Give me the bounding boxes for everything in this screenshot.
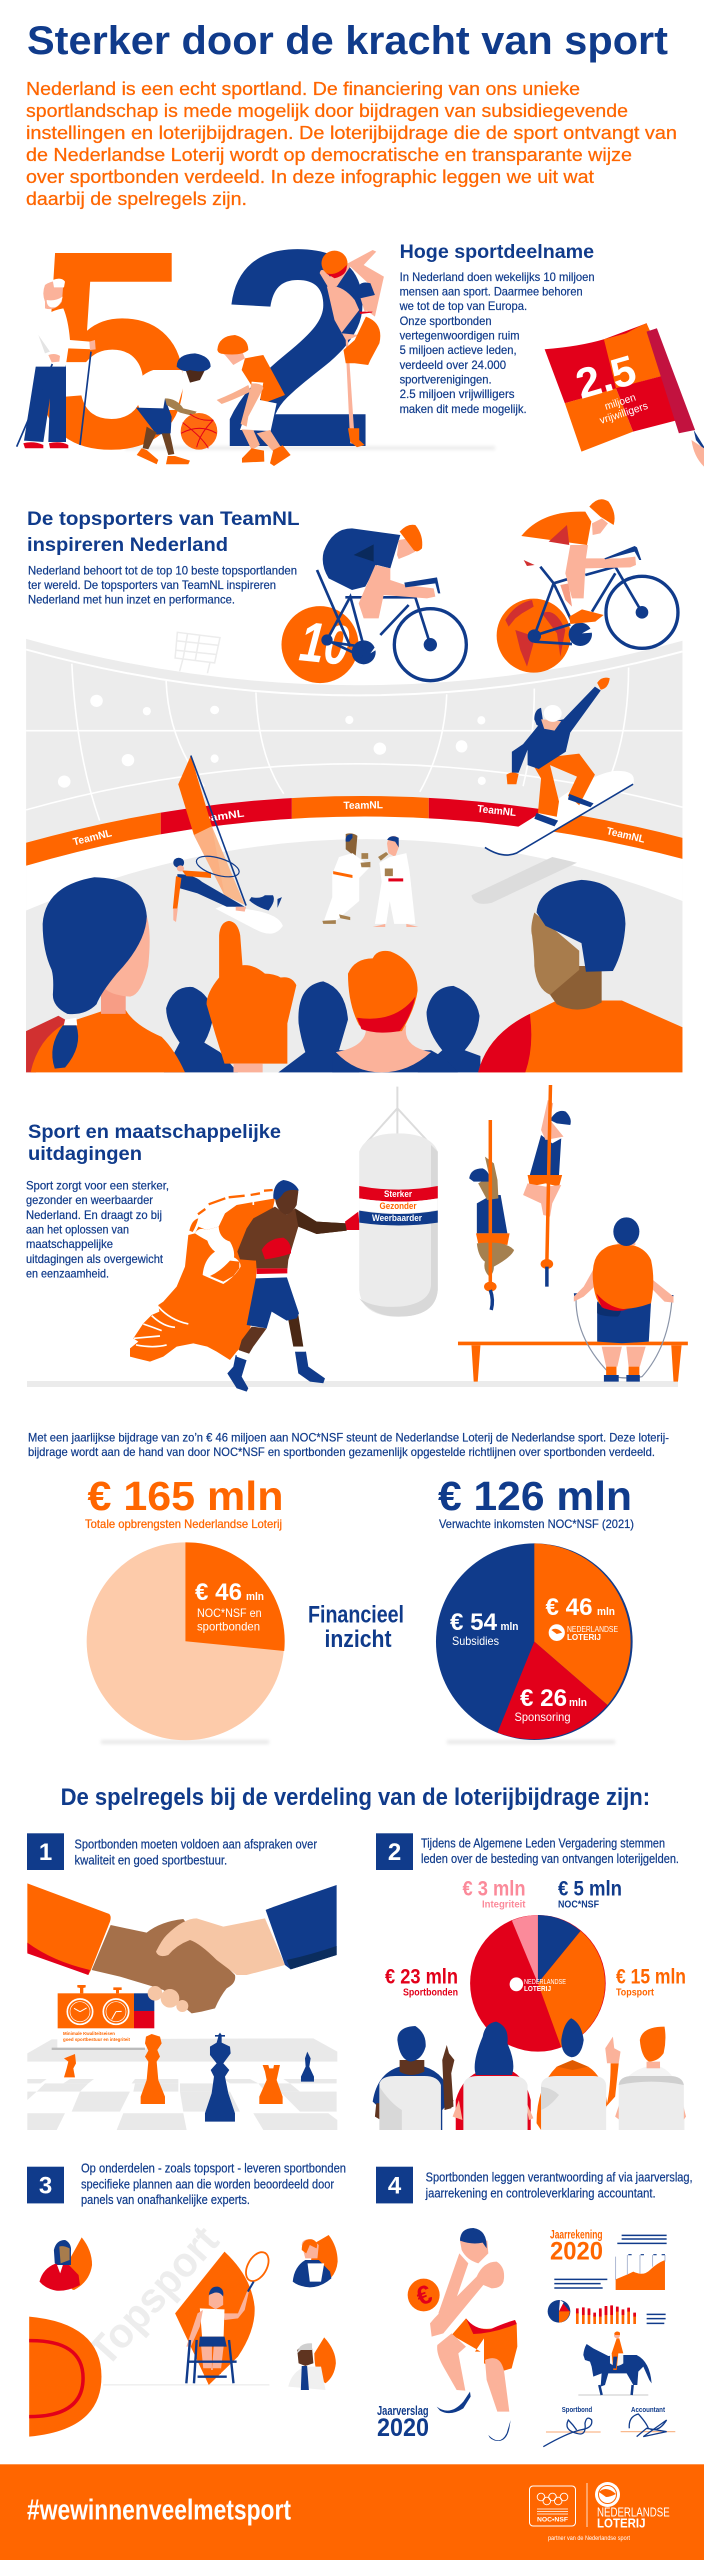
text: financial intro: Met een jaarlijkse bijdrage van zo’n € 46 miljoen aan NOC*NSF steunt de Nederlandse Loterij de Nederlandse sport. Deze loterij-: [28, 1432, 669, 1445]
signature labels: [562, 2405, 665, 2414]
panel: financieel inzicht: [28, 1432, 669, 1744]
heading: topsporters: De topsporters van TeamNL: [27, 509, 300, 530]
tagline: partner van de Nederlandse sport: [548, 2535, 630, 2542]
pie chart: NOC*NSF income: Sponsoring: [514, 1711, 570, 1724]
pie chart: loterij revenue: [87, 1542, 285, 1744]
pie chart: NOC*NSF income: € 54: [450, 1609, 498, 1636]
intro text: de Nederlandse Loterij wordt op democratische en transparante wijze: [26, 145, 632, 165]
text: rule 4: [425, 2171, 693, 2201]
audience member 4: [615, 2027, 686, 2130]
intro text: over sportbonden verdeeld. In deze infographic leggen we uit wat: [26, 167, 594, 187]
pie labels: € 15 mln: [616, 1965, 686, 1988]
text lines: [554, 2235, 667, 2323]
heading: uitdagingen: uitdagingen: [28, 1144, 142, 1165]
footer: [0, 2464, 704, 2560]
figure: snowboarder: [471, 678, 634, 904]
number box 2: 2: [388, 1839, 401, 1866]
panel: rule 1: [27, 1833, 337, 2130]
spectator: man right: [478, 880, 682, 1072]
stadium illustration: [26, 632, 682, 1072]
punching bag labels: Gezonder: [380, 1201, 417, 1211]
panel: rule 4: [376, 2167, 693, 2447]
figure: senior with poles: [17, 279, 96, 448]
figure: boxer: [227, 1180, 360, 1392]
intro text: [26, 79, 677, 209]
pie chart: NOC*NSF income: mln: [569, 1697, 587, 1709]
number box 1: [27, 1833, 64, 1870]
pie chart: NOC*NSF income: [436, 1543, 633, 1744]
handshake: [27, 1883, 337, 2013]
text: uitdagingen: uitdagingen als overgewicht: [26, 1253, 164, 1266]
seats: [379, 2076, 684, 2130]
text: uitdagingen: maatschappelijke: [26, 1238, 113, 1251]
panel: hoge sportdeelname: [17, 191, 704, 507]
text: hoge sportdeelname: In Nederland doen wekelijks 10 miljoen: [400, 271, 595, 284]
expert 3: [288, 2337, 336, 2390]
big numeral 5: 5: [34, 192, 191, 507]
expert 1: [40, 2237, 92, 2291]
floor shadow: [125, 446, 495, 450]
text: hoge sportdeelname: 2.5 miljoen vrijwilligers: [400, 388, 515, 401]
heading: topsporters: [27, 509, 300, 556]
flag: 2.5 miljoen vrijwilligers: vrijwilligers: [598, 400, 649, 427]
label: jaarrekening 2020: Jaarrekening: [550, 2228, 602, 2242]
punching bag: [359, 1087, 438, 1317]
spectator: woman with braid: [26, 877, 185, 1072]
intro text: instellingen en loterijbijdragen. De loterijbijdrage die de sport ontvangt van: [26, 123, 677, 143]
pie chart: loterij revenue: € 46: [195, 1579, 242, 1606]
text: hoge sportdeelname: vertegenwoordigen ruim: [400, 330, 520, 342]
ribbon labels: TeamNL: [477, 803, 517, 819]
text: hoge sportdeelname: verdeeld over 24.000: [400, 359, 506, 372]
text: uitdagingen: Nederland. En draagt zo bij: [26, 1209, 162, 1222]
text: rule 3: panels van onafhankelijke experts.: [81, 2193, 250, 2207]
pie labels: [385, 1877, 686, 1998]
pie chart: loterij revenue: NOC*NSF en: [197, 1607, 262, 1620]
figure: climber right: [523, 1085, 571, 1287]
number box 4: 4: [388, 2172, 402, 2200]
stat: 126 mln: € 126 mln: [438, 1473, 632, 1519]
text: uitdagingen: en eenzaamheid.: [26, 1268, 109, 1280]
floodlight: [175, 632, 220, 673]
figure: cyclist navy: [317, 525, 466, 681]
figure: gymnast: [320, 250, 384, 447]
pie chart: loterij revenue: mln: [246, 1591, 264, 1603]
label: jaarrekening 2020: 2020: [550, 2238, 603, 2266]
text: financial intro: [28, 1432, 669, 1459]
pie chart: NOC*NSF income: mln: [597, 1606, 615, 1618]
illustration: gym scene: [359, 1085, 688, 1382]
pie chart: loterij revenue: sportbonden: [197, 1620, 260, 1634]
text: hoge sportdeelname: mensen aan sport. Daarmee behoren: [400, 286, 583, 298]
pie labels: Topsport: [616, 1986, 654, 1998]
pie chart: NOC*NSF income: NEDERLANDSE: [567, 1625, 618, 1634]
flag: 2.5 miljoen vrijwilligers: [545, 323, 704, 467]
panel: topsporters: [26, 499, 682, 1072]
spectator: orange hair: [336, 951, 431, 1072]
signature labels: Accountant: [631, 2405, 665, 2414]
text: hoge sportdeelname: 5 miljoen actieve leden,: [400, 344, 517, 357]
figure: kid reaching: [217, 335, 291, 466]
text: rule 1: Sportbonden moeten voldoen aan afspraken over: [74, 1837, 317, 1851]
crowd: background silhouettes: [164, 981, 480, 1072]
number box 3: [27, 2167, 64, 2203]
text: uitdagingen: [26, 1180, 169, 1280]
expert 2: [293, 2235, 338, 2287]
flag: 2.5 miljoen vrijwilligers: 2.5: [571, 346, 641, 408]
text: rule 1: kwaliteit en goed sportbestuur.: [74, 1853, 227, 1867]
illustration: handshake and chess: [27, 1883, 337, 2130]
text: uitdagingen: aan het oplossen van: [26, 1224, 129, 1236]
floor shadow: [27, 1381, 678, 1387]
heading: spelregels: De spelregels bij de verdeling van de loterijbijdrage zijn:: [61, 1784, 650, 1811]
map of the Netherlands: [130, 1190, 275, 1362]
heading: topsporters: inspireren Nederland: [27, 535, 228, 556]
text: rule 2: Tijdens de Algemene Leden Vergadering stemmen: [421, 1836, 665, 1850]
illustration: people: [17, 279, 291, 466]
logo: Nederlandse Loterij: NEDERLANDSE: [597, 2504, 670, 2520]
bar chart: [576, 2305, 636, 2324]
big orange shape: [29, 2317, 101, 2437]
figure: kid with basketball: [135, 353, 217, 464]
heading: financieel inzicht: Financieel: [308, 1602, 404, 1628]
logo: NOC*NSF: NOC•NSF: [537, 2516, 568, 2524]
big numeral 2: 2: [220, 191, 377, 506]
pie labels: Integriteit: [482, 1898, 526, 1910]
stat: 126 mln: Verwachte inkomsten NOC*NSF (2021): [439, 1518, 634, 1531]
bench: [458, 1342, 688, 1382]
text: topsporters: ter wereld. De topsporters van TeamNL inspireren: [28, 579, 276, 592]
heading: financieel inzicht: [308, 1602, 404, 1653]
number box 2: [376, 1833, 413, 1870]
ribbon labels: [72, 799, 647, 848]
pie labels: € 3 mln: [462, 1877, 526, 1900]
panel: maatschappelijke uitdagingen: [26, 1085, 688, 1392]
charts and signatures: [543, 2235, 675, 2447]
stat: 165 mln: € 165 mln: [88, 1473, 284, 1519]
figures in stadium: [26, 678, 682, 1072]
rating sign: goed sportbestuur en integriteit: [63, 2037, 130, 2042]
heading: hoge sportdeelname: Hoge sportdeelname: [400, 242, 594, 263]
area chart: [616, 2255, 665, 2290]
ribbon labels: TeamNL: [343, 799, 384, 812]
text: hoge sportdeelname: maken dit mede mogelijk.: [400, 403, 527, 416]
panel: rule 3: [27, 2161, 346, 2437]
pie chart: NOC*NSF income: LOTERIJ: [567, 1633, 601, 1642]
hashtag: #wewinnenveelmetsport: [27, 2494, 291, 2526]
chess pieces: [64, 2033, 314, 2122]
pie chart: distribution: [470, 1915, 606, 2052]
text: hoge sportdeelname: [399, 271, 595, 416]
punching bag labels: Weerbaarder: [372, 1213, 423, 1223]
text: topsporters: [28, 564, 297, 607]
pie chart: NOC*NSF income: Subsidies: [452, 1635, 499, 1648]
text: hoge sportdeelname: Onze sportbonden: [400, 315, 492, 328]
text: topsporters: Nederland met hun inzet en performance.: [28, 594, 235, 607]
pie chart: NOC*NSF income: € 26: [520, 1685, 567, 1712]
number box 3: 3: [39, 2172, 52, 2200]
pie labels: NEDERLANDSE: [524, 1977, 566, 1986]
signature labels: Sportbond: [562, 2405, 593, 2414]
punching bag labels: [372, 1189, 423, 1223]
chess clock: [58, 1985, 154, 2028]
punching bag labels: Sterker: [384, 1189, 413, 1199]
text: topsporters: Nederland behoort tot de top 10 beste topsportlanden: [28, 564, 297, 578]
athlete in wheelchair: [103, 2250, 273, 2386]
pie labels: LOTERIJ: [524, 1984, 551, 1993]
figure: dressage horse: [578, 2331, 652, 2395]
ribbon labels: TeamNL: [605, 825, 647, 846]
divider: [586, 2483, 588, 2527]
pie labels: € 23 mln: [385, 1965, 458, 1988]
intro text: Nederland is een echt sportland. De financiering van ons unieke: [26, 79, 580, 99]
title: Sterker door de kracht van sport: [27, 19, 668, 63]
rating sign: Minimale Kwaliteitseisen: [63, 2031, 115, 2036]
heading: financieel inzicht: inzicht: [324, 1626, 392, 1653]
mini pie chart: [548, 2300, 570, 2323]
intro text: sportlandschap is mede mogelijk door bijdragen van subsidiegevende: [26, 101, 628, 121]
figure: judoka right: [373, 836, 418, 927]
text: financial intro: bijdrage wordt aan de hand van door NOC*NSF en sportbonden gezamenlijk opgestelde richtlijnen over sportbonden verdeeld.: [28, 1446, 655, 1459]
panel: rule 2: [373, 1833, 686, 2130]
text: rule 3: specifieke plannen aan die worden beoordeeld door: [81, 2177, 334, 2191]
pie labels: Sportbonden: [403, 1986, 458, 1998]
ribbon labels: TeamNL: [197, 807, 246, 826]
audience member 2: [453, 2022, 533, 2130]
heading: uitdagingen: [28, 1122, 281, 1165]
heading: uitdagingen: Sport en maatschappelijke: [28, 1122, 281, 1143]
coin euro symbol: €: [412, 2278, 436, 2312]
pie labels: € 5 mln: [558, 1877, 622, 1900]
figure: judoka left: [322, 833, 370, 924]
signature lines: [546, 2431, 675, 2433]
figure: cyclist orange: [497, 499, 678, 673]
figure: rope skipper: [574, 1217, 674, 1382]
illustration: panel and athlete: [29, 2235, 338, 2437]
text: rule 2: [421, 1836, 679, 1866]
rear wheel with number 10: [282, 606, 358, 683]
logo: NOC*NSF: [530, 2486, 576, 2526]
ribbon labels: TeamNL: [72, 827, 114, 848]
label: jaarverslag 2020: Jaarverslag: [377, 2404, 429, 2418]
audience member 1: [373, 2026, 454, 2130]
flag: 2.5 miljoen vrijwilligers: miljoen: [603, 392, 638, 413]
logo: Nederlandse Loterij: [595, 2482, 670, 2530]
rating sign: [63, 2031, 130, 2042]
figure: windsurfer: [173, 756, 283, 934]
chess board: [27, 2038, 337, 2130]
logo: Nederlandse Loterij: LOTERIJ: [597, 2516, 646, 2530]
text: hoge sportdeelname: we tot de top van Europa.: [399, 300, 527, 313]
pie chart: NOC*NSF income: mln: [500, 1621, 519, 1633]
text: uitdagingen: gezonder en weerbaarder: [26, 1194, 153, 1207]
figure: climber left: [469, 1120, 514, 1310]
audience member 3: [537, 2018, 621, 2130]
pie chart: NOC*NSF income: € 46: [546, 1594, 592, 1621]
text: rule 3: Op onderdelen - zoals topsport - leveren sportbonden: [81, 2161, 346, 2175]
rear wheel with number 10: 10: [297, 609, 352, 677]
number box 1: 1: [39, 1839, 52, 1866]
pie labels: NOC*NSF: [558, 1898, 599, 1910]
spectator: foam finger: [207, 921, 296, 1072]
text: rule 3: [81, 2161, 346, 2207]
watermark: topsport: Topsport: [79, 2217, 228, 2375]
text: rule 4: jaarrekening en controleverklaring accountant.: [425, 2187, 656, 2201]
text: hoge sportdeelname: sportverenigingen.: [400, 374, 492, 386]
label: jaarverslag 2020: 2020: [377, 2414, 429, 2442]
text: rule 1: [74, 1837, 317, 1867]
intro text: daarbij de spelregels zijn.: [26, 189, 247, 209]
stat: 165 mln: Totale opbrengsten Nederlandse Loterij: [85, 1518, 282, 1531]
figure: basketball player: [408, 2228, 517, 2441]
text: uitdagingen: Sport zorgt voor een sterker,: [26, 1180, 169, 1192]
illustration: audience: [373, 2018, 686, 2130]
number box 4: [376, 2167, 413, 2203]
